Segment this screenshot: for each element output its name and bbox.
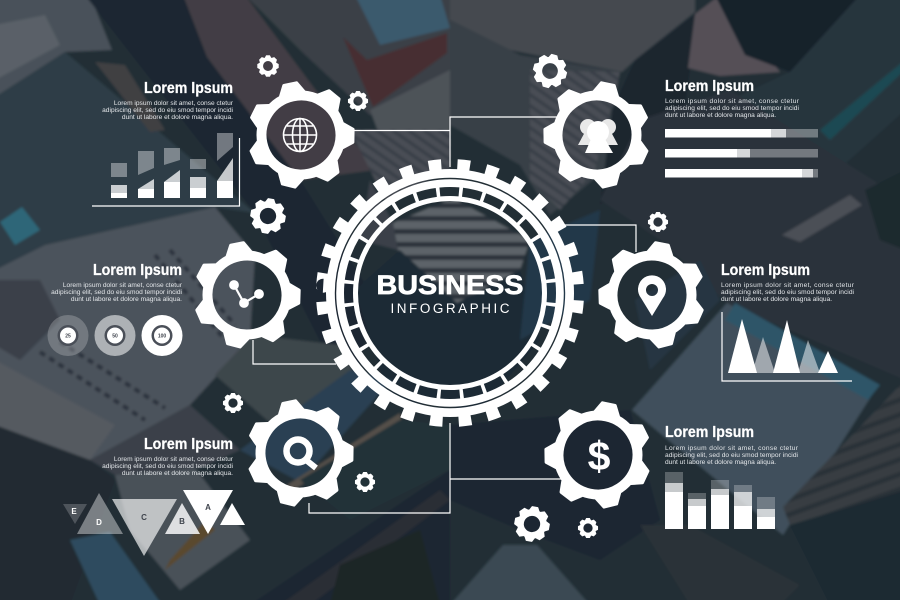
- text block: dunt ut labore et dolore magna aliqua.: [721, 296, 832, 303]
- progress bars: [665, 129, 818, 178]
- gear: dollar: $: [588, 433, 611, 479]
- top centre-right buildings: [450, 0, 695, 72]
- text block: dunt ut labore et dolore magna aliqua.: [71, 296, 182, 303]
- central building: [393, 198, 530, 303]
- left grey building: [0, 207, 255, 460]
- title: [376, 270, 524, 316]
- heading: Lorem Ipsum: [93, 262, 182, 279]
- central dark road: [85, 0, 375, 400]
- panel: bottom-left text and triangles: [63, 436, 245, 556]
- text block: Lorem ipsum dolor sit amet, conse ctetur: [114, 100, 234, 107]
- heading: Lorem Ipsum: [665, 424, 754, 441]
- gear: globe: [238, 73, 364, 197]
- connector lines: [253, 117, 636, 513]
- text block: Lorem ipsum dolor sit amet, conse ctetur: [665, 98, 800, 105]
- right building: [632, 303, 877, 535]
- panel: left text and progress circles: [48, 262, 183, 356]
- text block: dunt ut labore et dolore magna aliqua.: [665, 112, 776, 119]
- central gear: [316, 159, 584, 427]
- panel: top-right text and progress bars: [665, 78, 818, 178]
- circle stats: 50: [112, 333, 118, 339]
- bottom centre roads: [250, 470, 450, 600]
- mid left textured block: [215, 335, 365, 440]
- text block: [102, 100, 234, 121]
- text block: adipiscing elit, sed do eiu smod tempor incidi: [51, 289, 183, 296]
- text block: adipiscing elit, sed do eiu smod tempor incidi: [102, 107, 234, 114]
- text block: [665, 98, 800, 119]
- text block: dunt ut labore et dolore magna aliqua.: [122, 114, 233, 121]
- text block: adipiscing elit, sed do eiu smod tempor incidi: [665, 105, 800, 112]
- title: BUSINESS: [376, 270, 524, 300]
- heading: Lorem Ipsum: [665, 78, 754, 95]
- gear: magnifier: [237, 391, 363, 515]
- heading: Lorem Ipsum: [144, 436, 233, 453]
- gear: location pin: [590, 234, 714, 356]
- stacked bar chart: [665, 472, 775, 529]
- panel: right text and peak chart: [721, 262, 855, 381]
- triangle chart: B: [179, 517, 185, 526]
- text block: Lorem ipsum dolor sit amet, conse ctetur: [665, 445, 799, 452]
- text block: Lorem ipsum dolor sit amet, conse ctetur: [114, 456, 234, 463]
- text block: [51, 282, 183, 303]
- heading: Lorem Ipsum: [721, 262, 810, 279]
- text block: [102, 456, 234, 477]
- triangle chart: D: [96, 518, 102, 527]
- top-left dark roof: [0, 52, 255, 270]
- text block: Lorem ipsum dolor sit amet, conse ctetur: [721, 282, 855, 289]
- circle stats: [48, 315, 182, 356]
- text block: [665, 445, 799, 466]
- gear: people: [534, 73, 660, 197]
- triangle chart: E: [71, 507, 77, 516]
- text block: adipiscing elit, sed do eiu smod tempor incidi: [721, 289, 855, 296]
- text block: dunt ut labore et dolore magna aliqua.: [122, 470, 233, 477]
- text block: adipiscing elit, sed do eiu smod tempor incidi: [102, 463, 234, 470]
- circle stats: 100: [158, 333, 166, 339]
- peak chart: [722, 312, 852, 381]
- gear: dollar: [535, 393, 661, 517]
- circle stats: 25: [65, 333, 71, 339]
- triangle chart: A: [205, 503, 211, 512]
- triangle chart: C: [141, 513, 147, 522]
- gear: share nodes: [185, 234, 309, 356]
- bottom-left: [0, 425, 115, 600]
- brick building: [183, 0, 375, 180]
- text block: Lorem ipsum dolor sit amet, conse ctetur: [63, 282, 183, 289]
- small gears: [223, 51, 668, 544]
- title: INFOGRAPHIC: [390, 301, 510, 316]
- bar chart: [92, 133, 240, 206]
- heading: Lorem Ipsum: [144, 80, 233, 97]
- panel: top-left text and bar chart: [92, 80, 240, 206]
- triangle chart: [63, 490, 245, 556]
- text block: adipiscing elit, sed do eiu smod tempor incidi: [665, 452, 799, 459]
- panel: bottom-right text and stacked bars: [665, 424, 799, 529]
- text block: dunt ut labore et dolore magna aliqua.: [665, 459, 776, 466]
- text block: [721, 282, 855, 303]
- top-left rooftops: [0, 0, 112, 97]
